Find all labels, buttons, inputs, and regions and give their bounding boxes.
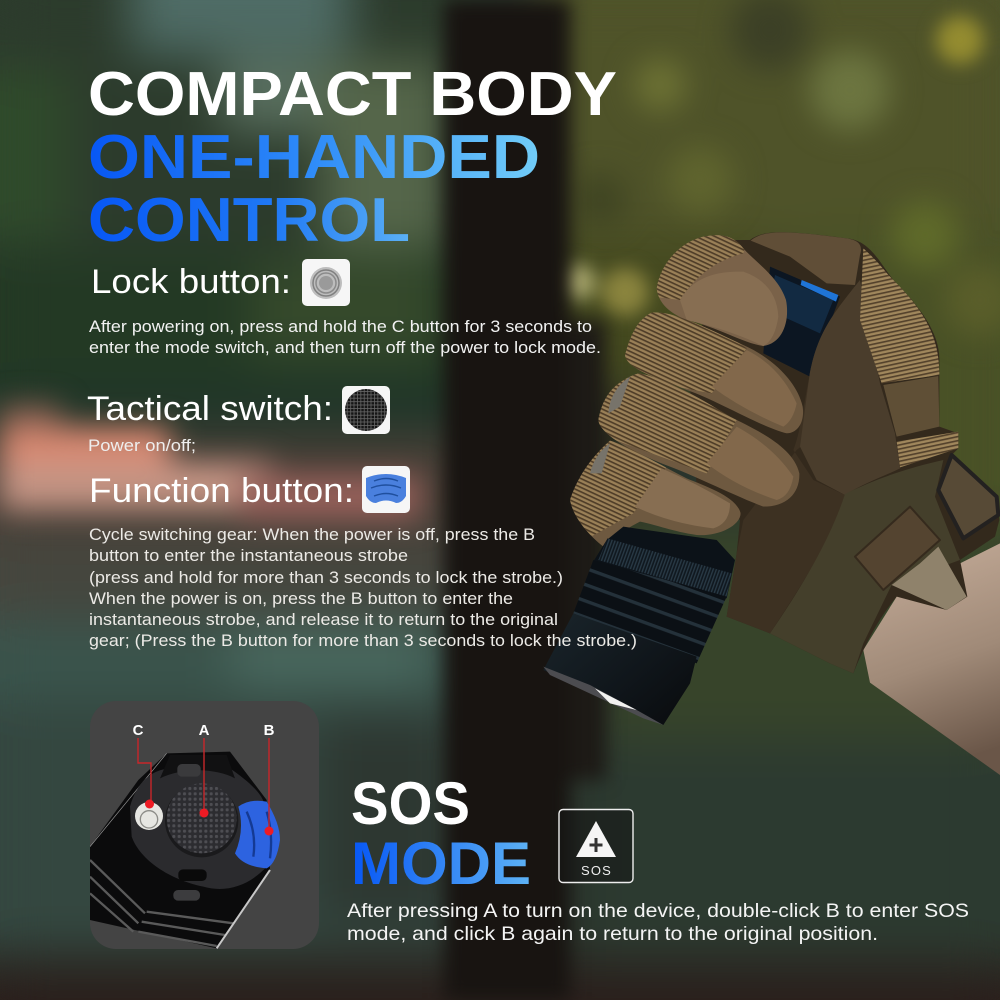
- glove silhouette: [690, 232, 999, 673]
- palm patch: [855, 507, 940, 590]
- flashlight lower body: [543, 527, 735, 725]
- icon: lock button: [302, 259, 350, 306]
- panel: button diagram: [90, 701, 319, 949]
- finger four: [567, 437, 743, 550]
- heading line: mode: MODE: [351, 830, 531, 897]
- icon: SOS badge: [559, 810, 633, 882]
- flashlight top view: [90, 752, 280, 948]
- palm ribs: [897, 432, 958, 467]
- icon: SOS badge: SOS: [581, 863, 612, 878]
- icon: function button: [362, 466, 410, 513]
- description: tactical switch: Power on/off;: [88, 437, 196, 455]
- olive wrist band: [770, 460, 960, 673]
- section: lock button: [89, 259, 601, 357]
- description: function button: (press and hold for more than 3 seconds to lock the strobe.): [89, 569, 563, 587]
- blurred pink sunset band: [0, 0, 1000, 520]
- section: tactical switch: [87, 386, 390, 455]
- palm suede: [727, 280, 880, 633]
- callout labels: B: [264, 722, 275, 739]
- blurred bokeh highlights: [559, 16, 984, 316]
- description: function button: Cycle switching gear: When the power is off, press the B: [89, 526, 535, 544]
- knuckle pad: [883, 376, 939, 437]
- finger three: [597, 370, 803, 510]
- callout lines: [138, 738, 269, 831]
- heading: SOS mode: [351, 770, 531, 897]
- heading: tactical switch: Tactical switch:: [87, 390, 333, 428]
- velcro tab: [938, 455, 998, 538]
- section: function button: [89, 466, 637, 650]
- icon: tactical switch: [342, 386, 390, 434]
- title line: compact body: COMPACT BODY: [88, 60, 617, 129]
- finger two: [623, 310, 807, 437]
- callout dots: [145, 800, 274, 836]
- description: lock button: enter the mode switch, and then turn off the power to lock mode.: [89, 339, 601, 357]
- description: SOS mode: After pressing A to turn on the device, double-click B to enter SOS: [347, 900, 969, 922]
- description: function button: When the power is on, press the B button to enter the: [89, 590, 513, 608]
- title line: control: CONTROL: [88, 186, 410, 255]
- description: function button: [89, 526, 637, 650]
- description: SOS mode: mode, and click B again to return to the original position.: [347, 923, 878, 945]
- flashlight top: [763, 267, 840, 377]
- thumb ribs: [860, 248, 939, 383]
- description: lock button: After powering on, press and hold the C button for 3 seconds to: [89, 318, 592, 336]
- thumb knuckle: [751, 232, 861, 285]
- callout labels: [133, 722, 275, 739]
- palm centre: [800, 280, 900, 495]
- finger one: [656, 235, 788, 346]
- title: [88, 60, 617, 255]
- heading line: SOS: SOS: [351, 770, 470, 837]
- forearm: [863, 542, 1000, 777]
- description: function button: gear; (Press the B button for more than 3 seconds to lock the strobe.): [89, 632, 637, 650]
- description: function button: button to enter the instantaneous strobe: [89, 547, 408, 565]
- description: function button: instantaneous strobe, and release it to return to the original: [89, 611, 558, 629]
- description: lock button: [89, 318, 601, 357]
- heading: lock button: Lock button:: [91, 263, 291, 301]
- callout labels: C: [133, 722, 144, 739]
- description: SOS mode: [347, 900, 969, 945]
- heading: function button: Function button:: [89, 472, 354, 510]
- callout labels: A: [199, 722, 210, 739]
- woven pull loop: [892, 547, 967, 610]
- title line: one-handed: ONE-HANDED: [88, 123, 540, 192]
- dark tree trunk: [444, 0, 606, 1000]
- photo: gloved hand holding flashlight: [543, 230, 1000, 777]
